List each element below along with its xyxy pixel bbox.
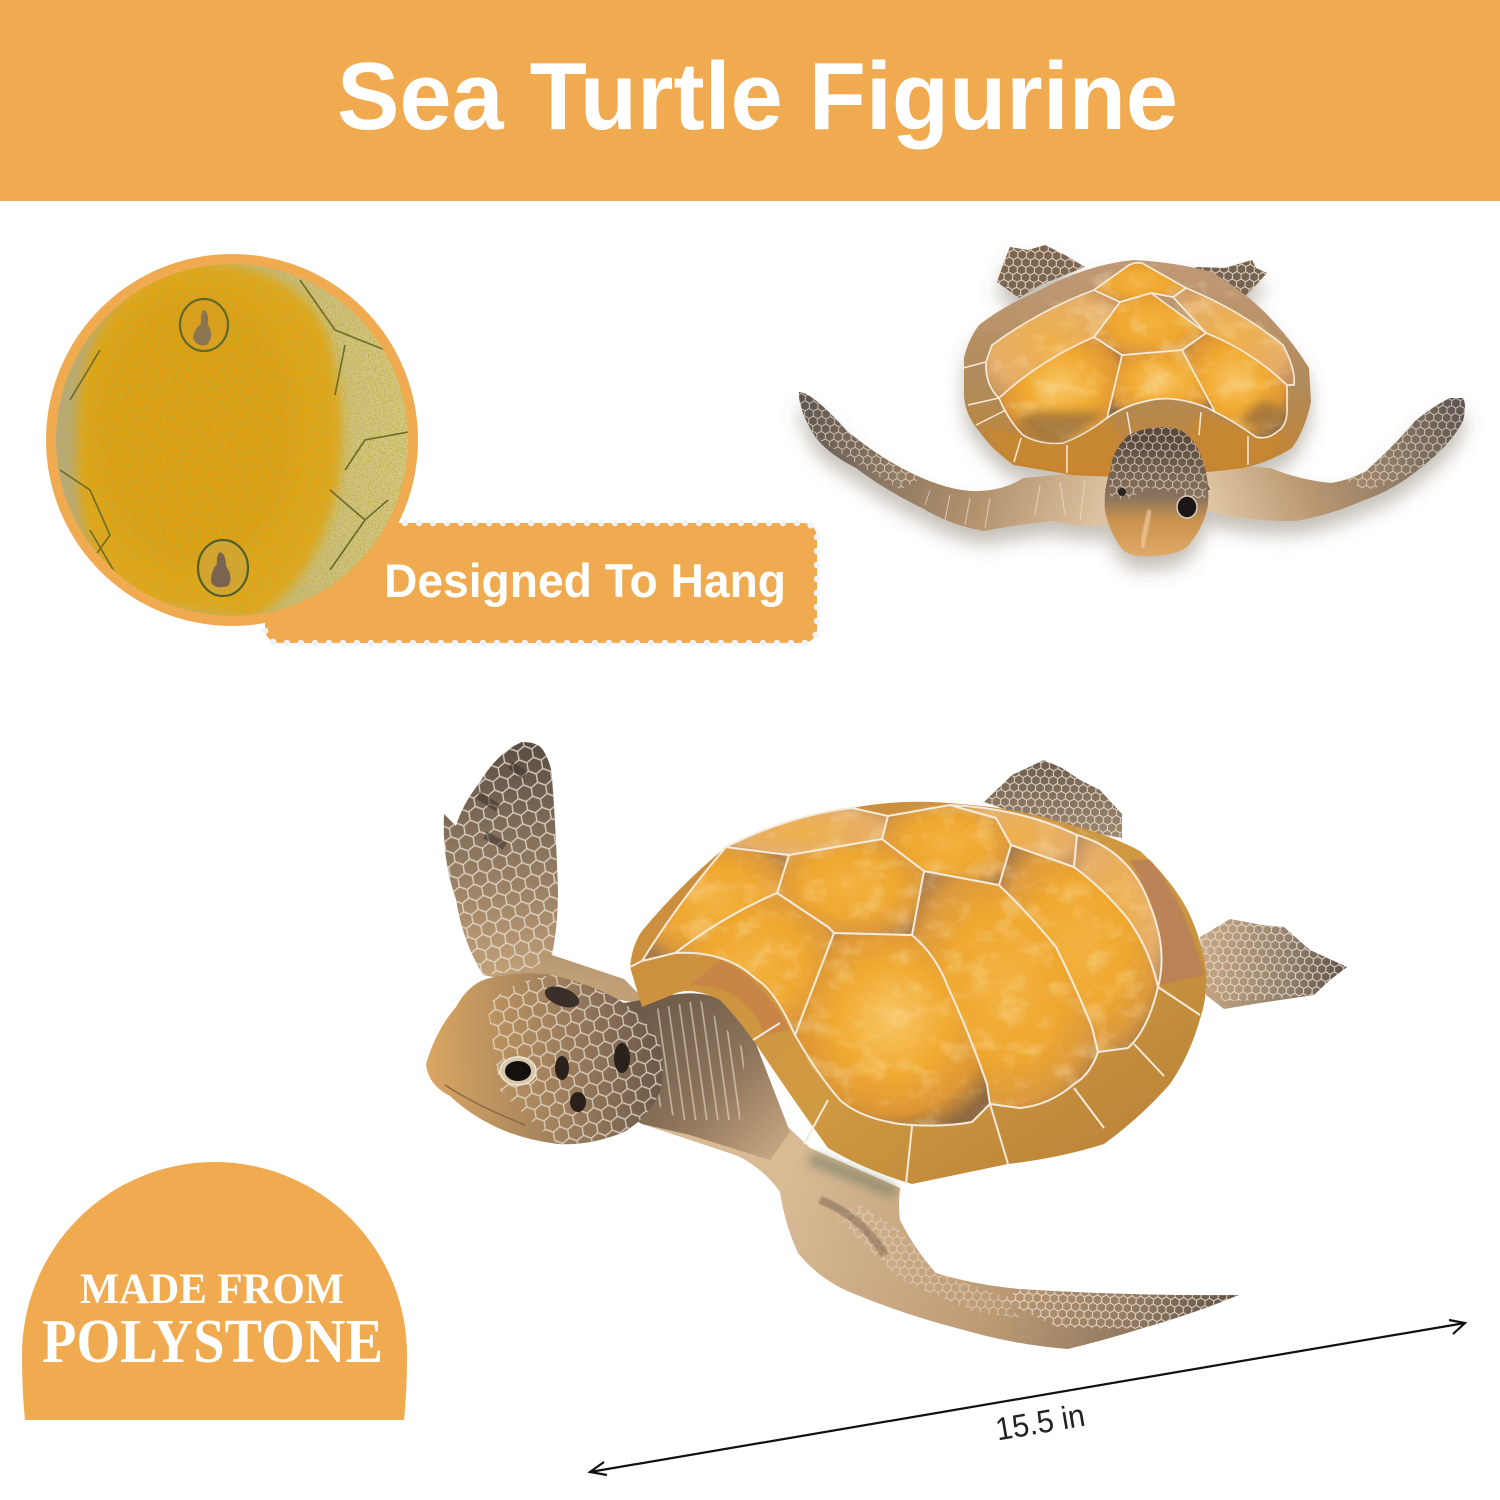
dimension label: 15.5 in [993, 1397, 1088, 1447]
title banner [0, 0, 1500, 201]
rear right flipper [1195, 260, 1267, 298]
shell rim [964, 260, 1311, 476]
shell rim [630, 802, 1206, 1184]
badge text: polystone: POLYSTONE [42, 1308, 383, 1376]
shell scutes [642, 805, 1162, 1126]
dimension arrow [590, 1320, 1465, 1475]
neck [1105, 444, 1210, 490]
raised front flipper [444, 742, 650, 1005]
head dark spots and eye [500, 982, 630, 1112]
top view turtle photo [799, 245, 1465, 556]
left front flipper [799, 392, 1110, 531]
rim lines [963, 362, 1248, 473]
lower front flipper [642, 1070, 1239, 1349]
back of figurine circular photo [46, 254, 418, 626]
keyhole mount: top [180, 299, 228, 351]
shell scutes [986, 263, 1294, 443]
large side view turtle photo [426, 742, 1347, 1349]
right front flipper [1205, 398, 1465, 521]
rear left flipper [997, 245, 1085, 298]
keyhole mount: bottom [198, 540, 248, 596]
rim lines [630, 961, 1200, 1184]
callout: designed to hang [265, 523, 817, 643]
neck [600, 993, 790, 1160]
rear right flipper [1200, 919, 1347, 1009]
top view shell and body group [799, 245, 1465, 556]
back flipper: far side [984, 760, 1122, 838]
head [1105, 427, 1208, 556]
callout label: Designed To Hang [384, 554, 786, 607]
title: Sea Turtle Figurine [337, 43, 1178, 150]
badge text: made from: MADE FROM [80, 1266, 344, 1313]
head [426, 973, 663, 1144]
material badge [22, 1162, 407, 1420]
